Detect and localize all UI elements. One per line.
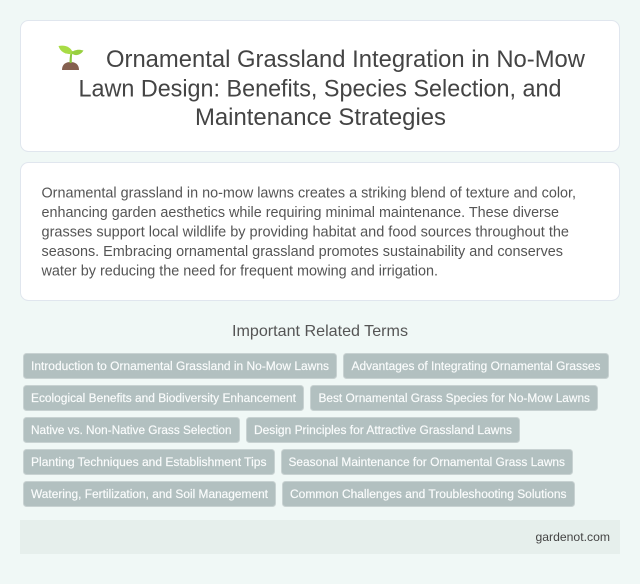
tag list	[24, 354, 608, 506]
tag: advantages	[344, 354, 608, 378]
tag: design principles: Design Principles for Attractive Grassland Lawns	[254, 423, 512, 437]
tag: watering and soil: Watering, Fertilization, and Soil Management	[31, 487, 269, 501]
text block: summary: water by reducing the need for frequent mowing and irrigation.	[40, 264, 438, 280]
tag: seasonal maintenance	[282, 450, 572, 474]
title: Maintenance Strategies	[195, 104, 446, 131]
tag: seasonal maintenance: Seasonal Maintenance for Ornamental Grass Lawns	[288, 455, 565, 469]
tag: best species: Best Ornamental Grass Species for No-Mow Lawns	[318, 391, 590, 405]
footer	[20, 520, 620, 554]
text block: summary: enhancing garden aesthetics while requiring minimal maintenance. These diverse	[42, 205, 559, 221]
tag: best species	[310, 386, 598, 410]
tag: common challenges	[282, 482, 574, 506]
text block: summary: seasons. Embracing ornamental grassland promotes sustainability and conserves	[42, 244, 563, 260]
text block: summary	[40, 186, 576, 280]
text block: summary: grasses support local wildlife by providing habitat and food sources throughout the	[42, 224, 569, 240]
tag: planting techniques: Planting Techniques and Establishment Tips	[31, 455, 266, 469]
tag: introduction	[24, 354, 336, 378]
panel: title card	[20, 20, 620, 152]
tag: common challenges: Common Challenges and Troubleshooting Solutions	[290, 487, 566, 501]
text block: summary: Ornamental grassland in no-mow lawns creates a striking blend of texture and color,	[42, 186, 576, 202]
tag: design principles	[246, 418, 520, 442]
title: Ornamental Grassland Integration in No-Mow	[106, 46, 586, 73]
tag: ecological benefits	[24, 386, 304, 410]
heading: important related terms: Important Related Terms	[232, 323, 408, 340]
footer: gardenot.com	[536, 530, 610, 544]
tag: native vs non-native	[24, 418, 240, 442]
tag: introduction: Introduction to Ornamental Grassland in No-Mow Lawns	[31, 359, 329, 373]
title: Lawn Design: Benefits, Species Selection, and	[78, 76, 562, 102]
panel: summary paragraph	[20, 162, 620, 300]
title	[78, 46, 586, 131]
tag: planting techniques	[24, 450, 274, 474]
tag: advantages: Advantages of Integrating Ornamental Grasses	[352, 359, 600, 373]
tag: watering and soil	[24, 482, 276, 506]
icon: sprout	[58, 46, 84, 70]
tag: ecological benefits: Ecological Benefits and Biodiversity Enhancement	[31, 391, 297, 405]
tag: native vs non-native: Native vs. Non-Native Grass Selection	[31, 423, 232, 437]
